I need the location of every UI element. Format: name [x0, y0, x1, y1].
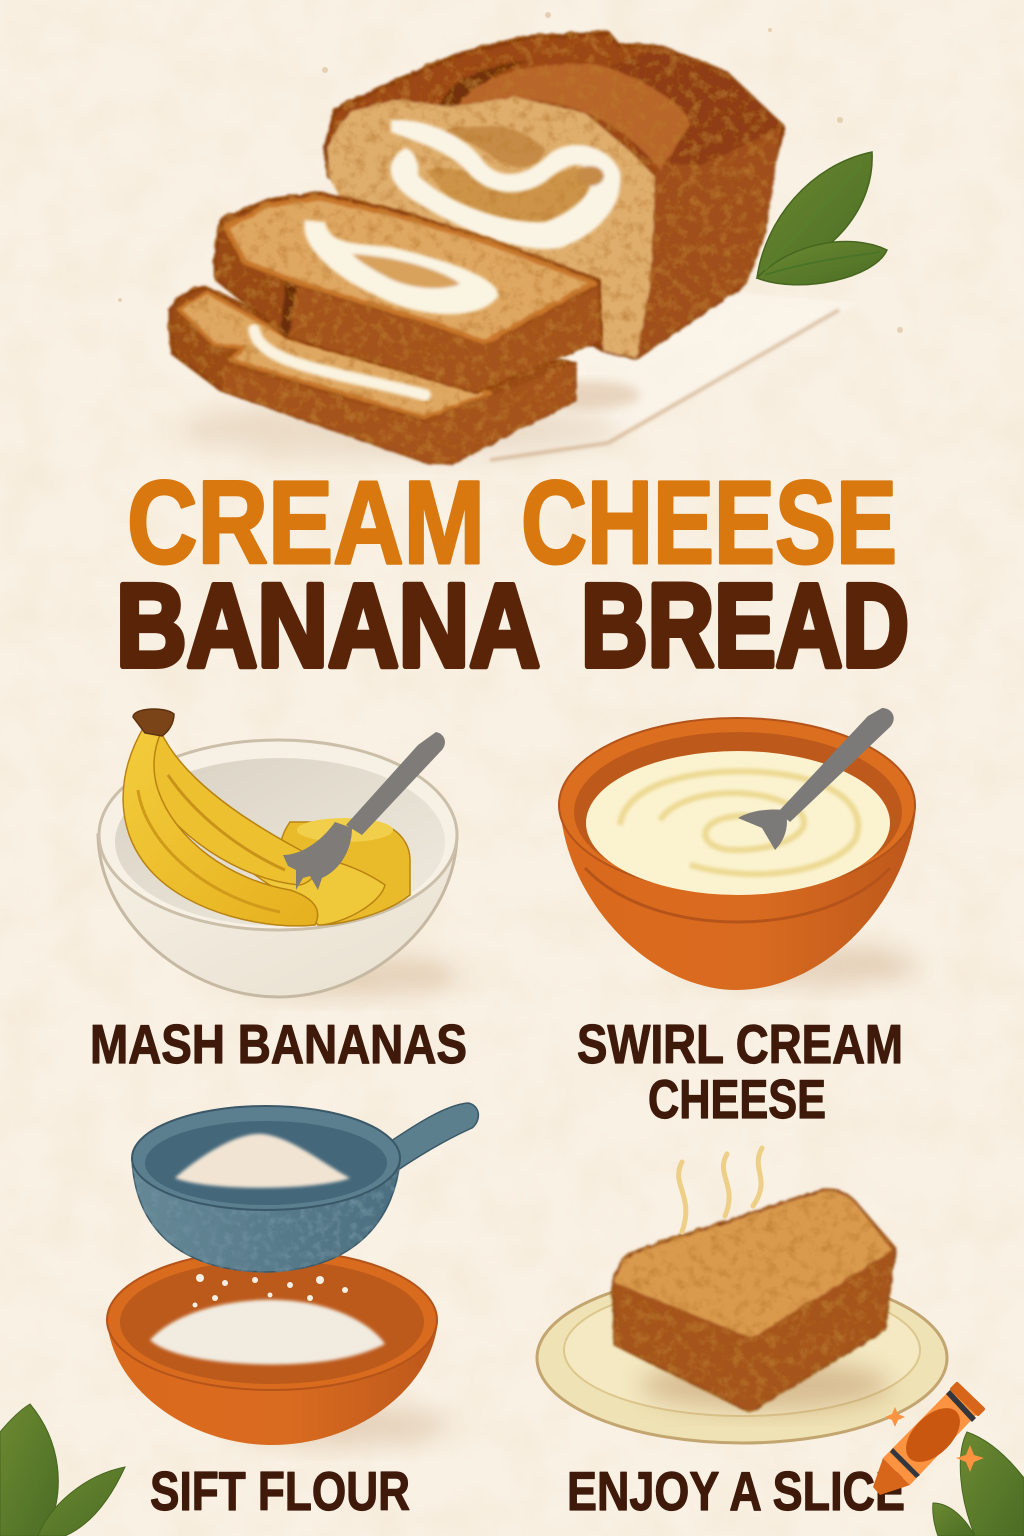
icon: crayon: [873, 1384, 984, 1495]
shadow: [230, 1403, 450, 1447]
label: swirl cream cheese: CHEESE: [648, 1068, 826, 1130]
icon: fork: [283, 732, 445, 890]
title line 1: CREAM: [127, 457, 485, 589]
title line 2: BREAD: [581, 560, 909, 692]
hero illustration: sliced loaf: [169, 33, 887, 463]
icon: bread slice: [612, 1190, 895, 1412]
step: swirl cream cheese: [559, 708, 920, 990]
title line 1: CHEESE: [521, 457, 897, 589]
flour specks: [192, 1274, 348, 1308]
title line 2: BANANA: [116, 560, 540, 692]
icon: blue sieve pan: [132, 1103, 478, 1272]
icon: leaves bottom right: [933, 1432, 1024, 1536]
slice: top: [214, 193, 601, 392]
parchment paper under loaf: [471, 290, 858, 463]
loaf shadow: [180, 402, 620, 458]
title: [116, 457, 909, 692]
label: sift flour: SIFT FLOUR: [150, 1460, 410, 1522]
icon: bananas: [123, 709, 410, 926]
label: swirl cream cheese: [577, 1013, 903, 1130]
icon: leaves behind loaf: [757, 152, 887, 285]
sparkles: [885, 1407, 905, 1427]
icon: orange bowl with flour: [107, 1250, 438, 1445]
bowl shadow: [680, 943, 920, 987]
crust side and top: [325, 33, 783, 358]
title line 2: [116, 560, 909, 692]
icon: plate: [537, 1273, 947, 1443]
cream cheese swirl in loaf: [391, 120, 621, 249]
step: sift flour: [107, 1103, 478, 1447]
loaf cut face: [327, 97, 655, 358]
slice: bottom: [169, 287, 575, 463]
cream cheese swirl in slice: [304, 220, 498, 314]
icon: steam: [679, 1148, 762, 1232]
icon: fork in cream: [738, 708, 894, 850]
swirl on bottom slice: [254, 330, 425, 395]
icon: leaves bottom left: [0, 1404, 125, 1536]
label: mash bananas: MASH BANANAS: [90, 1013, 467, 1075]
icon: white bowl: [98, 740, 457, 997]
step: enjoy a slice: [537, 1148, 947, 1443]
title line 1: [127, 457, 897, 589]
bowl shadow: [220, 953, 460, 997]
label: swirl cream cheese: SWIRL CREAM: [577, 1013, 903, 1075]
step: mash bananas: [98, 709, 460, 997]
label: enjoy a slice: ENJOY A SLICE: [567, 1460, 905, 1522]
loaf body: [325, 33, 783, 358]
icon: cream swirl: [586, 751, 890, 895]
icon: orange bowl: [559, 718, 916, 990]
